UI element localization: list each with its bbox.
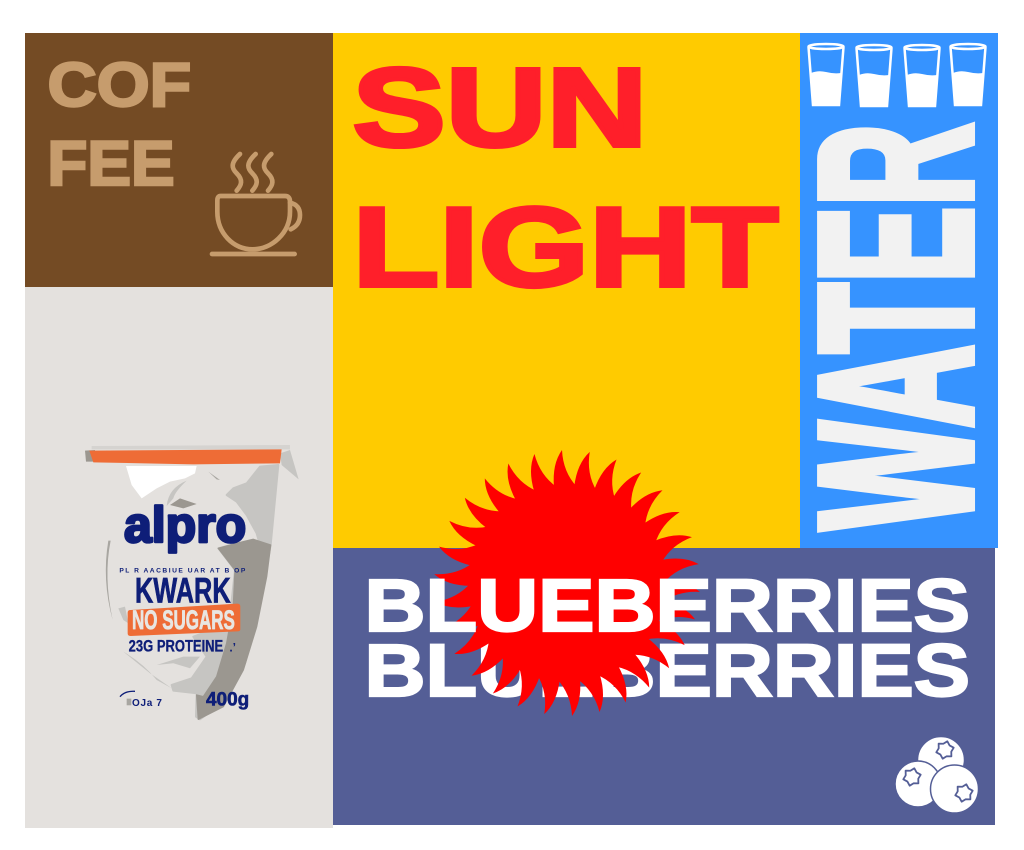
panel: sunlight xyxy=(333,33,800,548)
icon: red sun xyxy=(433,450,701,716)
panel: yogurt xyxy=(25,287,333,828)
claim: protein: 23G PROTEINE xyxy=(129,638,223,656)
icon: glass 4 xyxy=(950,44,986,105)
panel: coffee xyxy=(25,33,333,287)
icon: glass 1 xyxy=(808,44,844,105)
logo: alpro: alpro xyxy=(124,497,246,553)
icon: glass 3 xyxy=(904,45,940,106)
icon: coffee cup xyxy=(212,154,300,254)
heading: sunlight xyxy=(352,44,778,311)
product name: kwark: KWARK xyxy=(135,570,231,611)
illustration: alpro kwark pot xyxy=(85,445,299,719)
heading: sunlight: LIGHT xyxy=(352,185,778,311)
text: blueberries first line: BLUEBERRIES xyxy=(364,564,970,647)
panel: water xyxy=(775,33,1017,548)
text: blueberries second line: BLUEBERRIES xyxy=(364,629,970,712)
badge: no sugars: NO SUGARS xyxy=(132,605,235,635)
heading: sunlight: SUN xyxy=(352,44,647,170)
heading: coffee xyxy=(47,50,191,199)
icon: four glasses xyxy=(808,44,986,106)
icon: glass 2 xyxy=(856,45,892,106)
small logo xyxy=(120,691,162,709)
panel: blueberries xyxy=(333,548,995,825)
small print: PL R AACBIUE UAR AT B OP xyxy=(119,567,246,574)
illustration: alpro kwark pot: .ʼ xyxy=(229,640,236,654)
heading: water: WATER xyxy=(775,123,1017,530)
small logo: OJa 7 xyxy=(132,698,162,709)
heading: coffee: FEE xyxy=(47,128,175,199)
weight: 400g: 400g xyxy=(206,689,249,710)
icon: blueberries xyxy=(895,736,978,813)
heading: coffee: COF xyxy=(48,50,191,119)
orange band xyxy=(89,449,282,464)
